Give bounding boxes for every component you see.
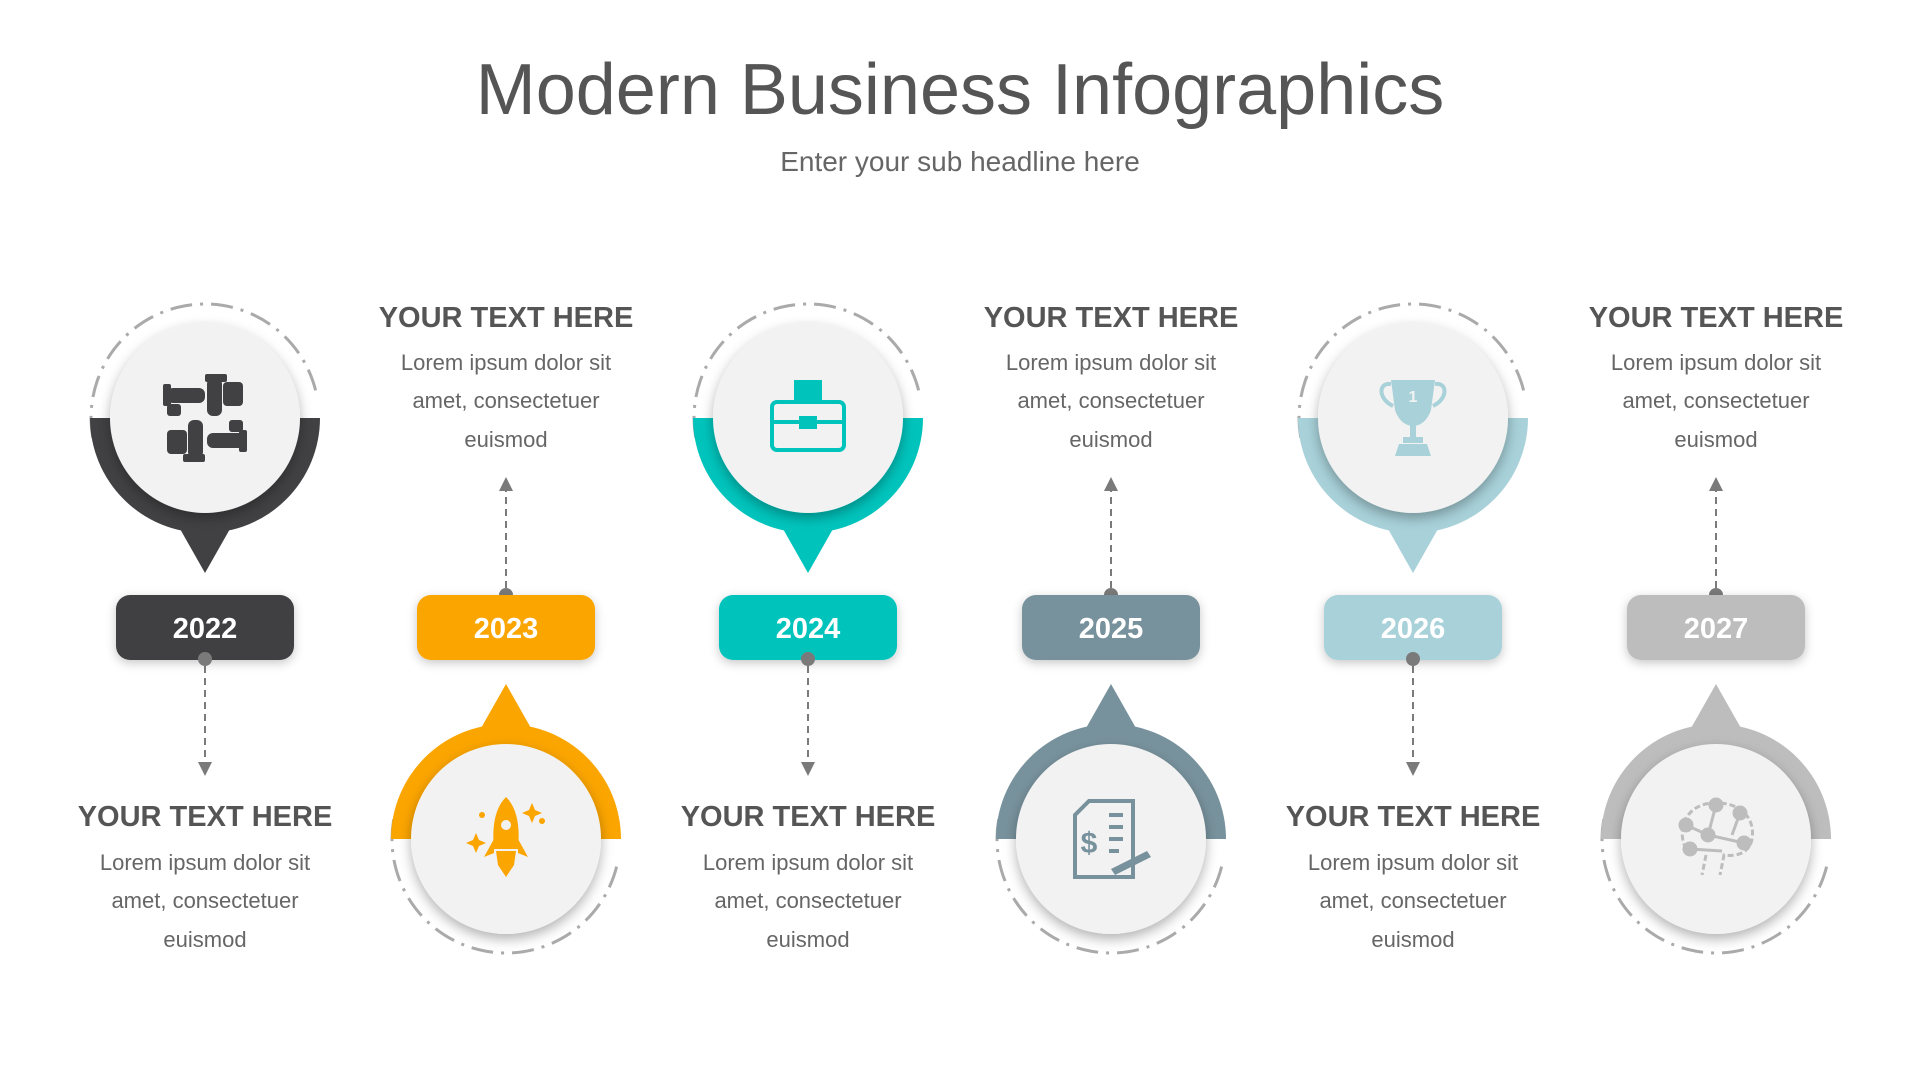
arrow up 2027: [1709, 477, 1723, 602]
text block 2024: amet, consectetuer: [714, 888, 902, 913]
arrow up 2023: [499, 477, 513, 602]
text block 2022: amet, consectetuer: [111, 888, 299, 913]
column 2024: [676, 286, 935, 952]
column 2023: [374, 302, 633, 971]
text block 2022: YOUR TEXT HERE: [78, 801, 332, 833]
icon: briefcase: [772, 382, 844, 450]
marker: 2025: [979, 684, 1226, 971]
marker: 2022: [73, 286, 320, 573]
year box 2022: [116, 595, 294, 660]
text block 2024: euismod: [766, 927, 850, 952]
year box 2026: [1324, 595, 1502, 660]
text block 2026: amet, consectetuer: [1319, 888, 1507, 913]
column 2027: [1584, 302, 1843, 971]
text block 2022: Lorem ipsum dolor sit: [100, 850, 310, 875]
year box 2026: 2026: [1381, 613, 1445, 645]
icon: hands: [163, 374, 247, 462]
arrow down 2024: [801, 652, 815, 776]
icon: trophy: 1: [1409, 389, 1418, 406]
year box 2025: [1022, 595, 1200, 660]
column 2026: [1281, 286, 1540, 952]
text block 2027: [1589, 302, 1843, 452]
icon: brain: [1680, 799, 1753, 875]
text block 2027: euismod: [1674, 427, 1758, 452]
arrow down 2022: [198, 652, 212, 776]
text block 2025: amet, consectetuer: [1017, 388, 1205, 413]
arrow up 2025: [1104, 477, 1118, 602]
subtitle: Enter your sub headline here: [780, 146, 1140, 177]
text block 2022: euismod: [163, 927, 247, 952]
year box 2023: 2023: [474, 613, 538, 645]
arrow down 2026: [1406, 652, 1420, 776]
text block 2027: amet, consectetuer: [1622, 388, 1810, 413]
year box 2024: 2024: [776, 613, 840, 645]
text block 2023: [379, 302, 633, 452]
icon: rocket: [466, 797, 545, 877]
text block 2026: [1286, 801, 1540, 952]
text block 2025: YOUR TEXT HERE: [984, 302, 1238, 334]
text block 2026: euismod: [1371, 927, 1455, 952]
text block 2026: YOUR TEXT HERE: [1286, 801, 1540, 833]
year box 2025: 2025: [1079, 613, 1143, 645]
icon: invoice: [1075, 801, 1151, 877]
year box 2024: [719, 595, 897, 660]
title: Modern Business Infographics: [476, 50, 1444, 130]
text block 2023: Lorem ipsum dolor sit: [401, 350, 611, 375]
text block 2027: YOUR TEXT HERE: [1589, 302, 1843, 334]
text block 2024: [681, 801, 935, 952]
marker: 2027: [1584, 684, 1831, 971]
text block 2025: euismod: [1069, 427, 1153, 452]
text block 2024: YOUR TEXT HERE: [681, 801, 935, 833]
text block 2025: Lorem ipsum dolor sit: [1006, 350, 1216, 375]
marker: 2023: [374, 684, 621, 971]
icon: trophy: [1382, 380, 1444, 456]
marker: 2024: [676, 286, 923, 573]
marker: 2026: [1281, 286, 1528, 573]
year box 2027: 2027: [1684, 613, 1748, 645]
year box 2022: 2022: [173, 613, 237, 645]
text block 2023: YOUR TEXT HERE: [379, 302, 633, 334]
column 2025: [979, 302, 1238, 971]
text block 2023: amet, consectetuer: [412, 388, 600, 413]
text block 2024: Lorem ipsum dolor sit: [703, 850, 913, 875]
year box 2027: [1627, 595, 1805, 660]
text block 2022: [78, 801, 332, 952]
year box 2023: [417, 595, 595, 660]
icon: invoice: $: [1081, 827, 1098, 860]
text block 2023: euismod: [464, 427, 548, 452]
text block 2027: Lorem ipsum dolor sit: [1611, 350, 1821, 375]
text block 2025: [984, 302, 1238, 452]
text block 2026: Lorem ipsum dolor sit: [1308, 850, 1518, 875]
column 2022: [73, 286, 332, 952]
